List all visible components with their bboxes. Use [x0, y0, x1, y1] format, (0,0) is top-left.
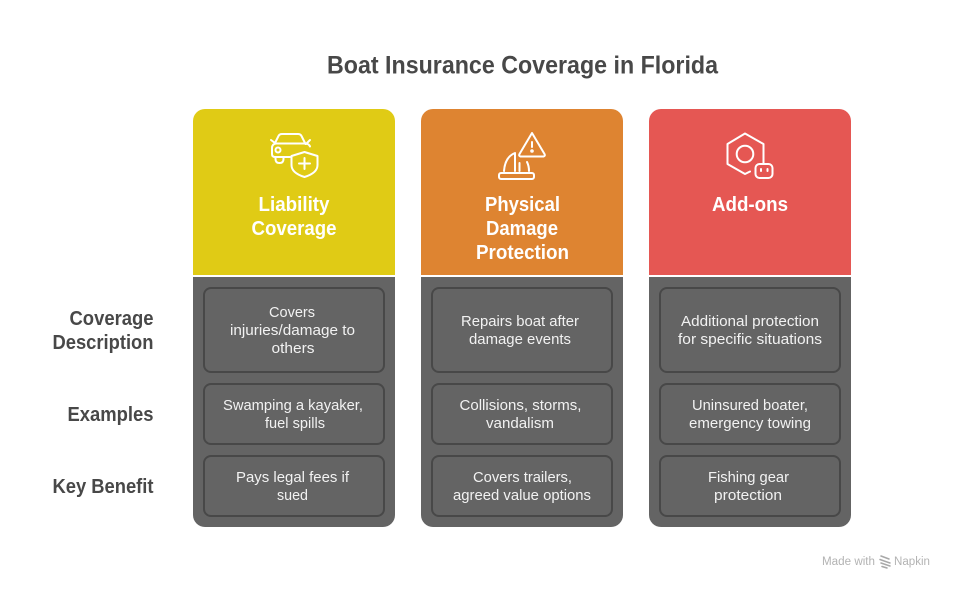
panel: liability coverage — [193, 109, 395, 527]
cell: key benefit: sued — [277, 487, 308, 504]
row labels — [52, 308, 154, 498]
header: physical damage — [421, 109, 623, 275]
heading: physical damage protection: Physical — [485, 194, 560, 216]
cell: description — [204, 288, 384, 372]
label: coverage description: Description — [52, 332, 154, 354]
heading: liability coverage: Liability — [258, 194, 330, 216]
icon: car with shield — [271, 134, 318, 177]
cell: examples: Collisions, storms, — [460, 397, 582, 414]
label: coverage description — [52, 308, 154, 354]
cell: key benefit — [432, 456, 612, 516]
icon: hexagon nut with robot — [728, 134, 772, 178]
cell: description: Covers — [269, 304, 315, 321]
cell: examples — [660, 384, 840, 444]
cell: key benefit — [660, 456, 840, 516]
cell: description: others — [272, 340, 314, 357]
footer: made with napkin: Made with — [822, 556, 875, 568]
cell: key benefit: Pays legal fees if — [236, 469, 350, 486]
icon: napkin logo — [880, 556, 890, 568]
heading: physical damage protection — [476, 194, 569, 264]
header: add-ons — [649, 109, 851, 275]
cell: description: for specific situations — [678, 331, 822, 348]
cell: examples: Uninsured boater, — [692, 397, 808, 414]
heading: liability coverage — [252, 194, 336, 240]
cell: key benefit: Covers trailers, — [473, 469, 572, 486]
cell: examples — [204, 384, 384, 444]
title: Boat Insurance Coverage in Florida — [327, 52, 719, 80]
cell: examples: Swamping a kayaker, — [223, 397, 363, 414]
panel: add-ons — [649, 109, 851, 527]
cell: key benefit: Fishing gear — [708, 469, 789, 486]
cell: description: Additional protection — [681, 313, 819, 330]
cell: examples: vandalism — [486, 415, 554, 432]
cell: description — [660, 288, 840, 372]
body background — [421, 277, 623, 527]
panel: physical damage protection — [421, 109, 623, 527]
cell: examples: emergency towing — [689, 415, 811, 432]
cell: examples: fuel spills — [265, 415, 325, 432]
header: liability — [193, 109, 395, 275]
body background — [193, 277, 395, 527]
heading: liability coverage: Coverage — [252, 218, 336, 240]
cell: description: damage events — [469, 331, 571, 348]
body background — [649, 277, 851, 527]
heading: add-ons: Add-ons — [712, 194, 788, 216]
cell: key benefit: protection — [714, 487, 782, 504]
cell: key benefit: agreed value options — [453, 487, 591, 504]
cell: description — [432, 288, 612, 372]
label: examples: Examples — [68, 404, 154, 426]
icon: boat with warning — [499, 133, 545, 179]
cell: description: Repairs boat after — [461, 313, 579, 330]
footer: made with napkin — [822, 556, 930, 568]
heading: physical damage protection: Damage — [486, 218, 558, 240]
heading: physical damage protection: Protection — [476, 242, 569, 264]
label: key benefit: Key Benefit — [52, 476, 154, 498]
cell: description: injuries/damage to — [230, 322, 355, 339]
cell: key benefit — [204, 456, 384, 516]
footer: made with napkin: Napkin — [894, 556, 930, 568]
label: coverage description: Coverage — [70, 308, 154, 330]
cell: examples — [432, 384, 612, 444]
